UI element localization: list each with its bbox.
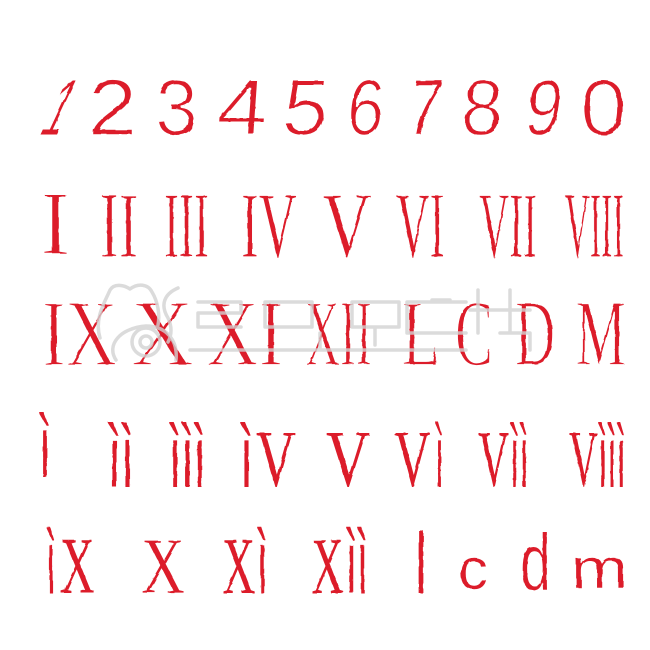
numeral C: C xyxy=(455,281,493,386)
watermark strokes xyxy=(190,290,530,350)
numeral D: D xyxy=(515,281,555,386)
letter l: l xyxy=(415,516,427,612)
numeral ix: X xyxy=(60,522,95,611)
row: upper-case roman numerals IX to M xyxy=(42,281,626,386)
row: lower-case roman numerals i to viii: ì xyxy=(435,407,444,506)
numeral II: II xyxy=(100,173,138,278)
row: lower-case roman numerals ix to m xyxy=(46,513,628,613)
numeral xii xyxy=(311,513,368,613)
letter m: m xyxy=(571,537,628,601)
numeral xi: X xyxy=(222,522,255,611)
digit 8: 8 xyxy=(459,63,506,152)
numeral vii xyxy=(478,407,529,506)
digit 9: 9 xyxy=(519,63,569,153)
numeral I: I xyxy=(41,173,70,274)
digit 1: 1 xyxy=(29,63,93,152)
numeral VII: VII xyxy=(479,173,537,278)
digit 2: 2 xyxy=(88,63,137,152)
numeral x: X xyxy=(141,522,185,611)
watermark cat xyxy=(98,285,178,360)
numeral iv xyxy=(240,407,296,506)
numeral iv: V xyxy=(256,415,296,504)
numeral ix: ì xyxy=(46,513,56,613)
numeral X: X xyxy=(131,281,194,386)
letter c: c xyxy=(458,537,488,602)
numeral IX: IX xyxy=(42,281,117,386)
row: arabic digits xyxy=(29,62,627,153)
row: lower-case roman numerals i to viii: ì xyxy=(39,397,51,496)
letter d: d xyxy=(520,518,551,608)
numeral XI: XI xyxy=(206,281,283,386)
numeral vii: V xyxy=(478,415,509,504)
numeral vi xyxy=(394,407,444,506)
numeral ix xyxy=(46,513,95,613)
row: lower-case roman numerals i to viii: ìì xyxy=(510,407,529,506)
digit 7: 7 xyxy=(402,63,448,153)
row: lower-case roman numerals ix to m: ì xyxy=(257,513,268,613)
numeral v: V xyxy=(326,415,370,504)
numeral IV: IV xyxy=(241,173,297,278)
numeral XII: XII xyxy=(305,281,372,386)
digit 4: 4 xyxy=(214,62,271,152)
numeral viii: V xyxy=(569,415,598,504)
digit 0: 0 xyxy=(580,63,627,152)
numeral iii: ììì xyxy=(169,407,206,506)
numeral vi: V xyxy=(394,415,431,504)
numeral III: III xyxy=(164,173,209,278)
numeral M: M xyxy=(576,281,626,386)
digit 3: 3 xyxy=(155,63,198,152)
numeral xii: X xyxy=(311,522,344,611)
digit 5: 5 xyxy=(278,62,334,152)
numeral viii xyxy=(569,407,626,506)
numeral iv: ì xyxy=(240,407,253,506)
row: upper-case roman numerals I to VIII xyxy=(41,173,624,278)
watermark: pale cat and abstract strokes xyxy=(98,285,530,360)
numeral V: V xyxy=(322,173,372,278)
numeral VI: VI xyxy=(396,173,445,278)
row: lower-case roman numerals i to viii xyxy=(39,397,626,506)
numeral L: L xyxy=(402,281,440,386)
row: lower-case roman numerals ix to m: ìì xyxy=(346,513,368,613)
numeral ii: ìì xyxy=(108,407,134,506)
digit 6: 6 xyxy=(344,62,388,152)
